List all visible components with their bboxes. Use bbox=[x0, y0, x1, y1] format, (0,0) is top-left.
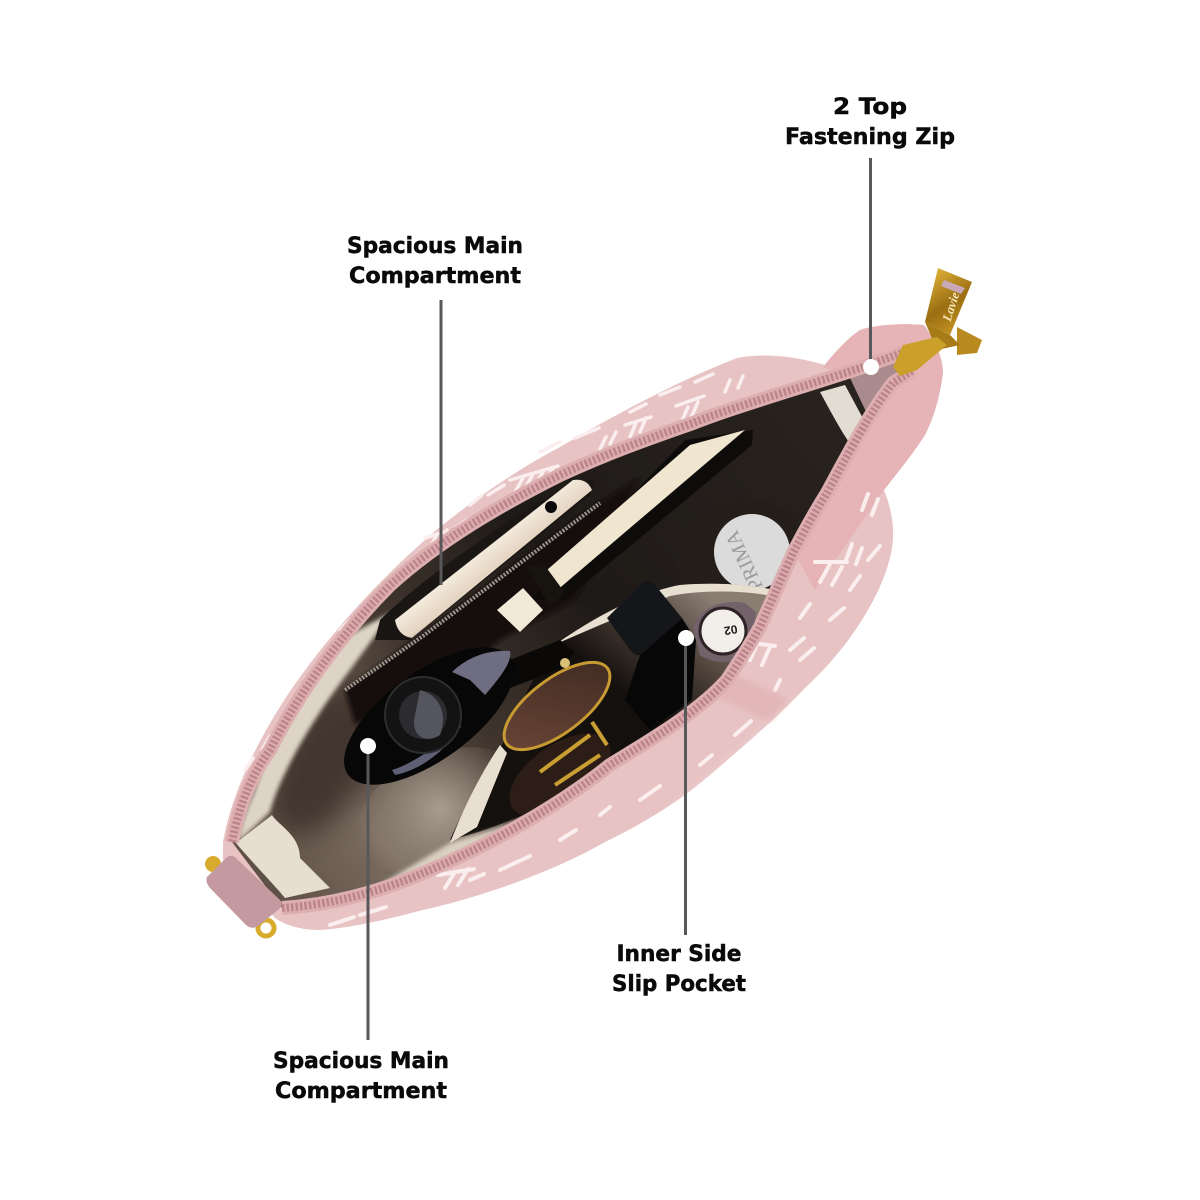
callout: spacious main compartment upper bbox=[347, 234, 523, 585]
callout heading: Spacious Main bbox=[273, 1049, 449, 1074]
callout: inner side slip pocket bbox=[612, 630, 746, 997]
marker dot bbox=[360, 738, 376, 754]
book cover bbox=[567, 430, 753, 598]
polish bottle bbox=[693, 602, 756, 662]
callout heading: Inner Side bbox=[616, 942, 742, 967]
cream lining lower edge bbox=[380, 819, 516, 882]
pull logo: Lavie bbox=[939, 290, 962, 324]
logo print on lower panel bbox=[330, 494, 880, 925]
lower zip teeth bbox=[282, 370, 913, 908]
book pages bbox=[547, 430, 745, 592]
brush star highlight bbox=[399, 691, 447, 739]
brush strap bbox=[510, 640, 574, 688]
dark shadow left side bbox=[264, 679, 376, 846]
nail polish bbox=[693, 602, 756, 662]
callout: 2 top fastening zip bbox=[785, 95, 955, 375]
leather strap tab bbox=[206, 856, 282, 928]
seam patch on lower panel bbox=[700, 670, 790, 722]
callout heading bbox=[347, 234, 523, 289]
mid bag floor bbox=[370, 747, 514, 868]
tab fabric near zip bbox=[790, 324, 943, 590]
upper lens bbox=[502, 660, 612, 752]
zip pull bbox=[925, 268, 972, 335]
hair brush bbox=[344, 640, 574, 785]
callout: spacious main compartment lower bbox=[273, 738, 449, 1104]
callout heading: Spacious Main bbox=[347, 234, 523, 259]
phone back shadow bbox=[375, 525, 520, 640]
organiser zipper bbox=[345, 503, 600, 690]
jar label: PRIMA bbox=[721, 527, 768, 594]
callout heading bbox=[612, 942, 746, 997]
lower zip tape bbox=[282, 370, 913, 908]
pull window bbox=[941, 280, 965, 294]
phone camera hole bbox=[545, 501, 557, 513]
polish shade number: 02 bbox=[723, 622, 738, 638]
cream lining bottom corner bbox=[236, 815, 330, 898]
lipstick cap bbox=[607, 581, 682, 655]
sunglasses bbox=[502, 658, 612, 815]
gold ring upper bbox=[205, 856, 221, 872]
lipstick body bbox=[625, 618, 696, 730]
phone body bbox=[395, 480, 592, 638]
lipstick black case bbox=[607, 581, 696, 730]
callout heading: 2 Top bbox=[833, 95, 907, 120]
leader line bbox=[869, 158, 872, 367]
gold arms bbox=[540, 722, 607, 785]
callout heading: Fastening Zip bbox=[785, 125, 955, 150]
bag illustration bbox=[205, 268, 982, 936]
sunglass hinge bbox=[560, 658, 570, 668]
gold ring lower bbox=[258, 920, 274, 936]
rear tab bbox=[957, 327, 982, 355]
brush highlight lower bbox=[392, 725, 462, 775]
marker dot bbox=[678, 630, 694, 646]
callout heading bbox=[785, 95, 955, 150]
logo print on upper panel bbox=[240, 374, 743, 800]
jar lid bbox=[714, 514, 790, 590]
cream strip by pocket bbox=[755, 590, 782, 630]
callout heading bbox=[273, 1049, 449, 1104]
link ring bbox=[925, 322, 960, 350]
callout heading: Compartment bbox=[349, 264, 521, 289]
jar dark glass bbox=[677, 498, 813, 622]
dark organiser panel bbox=[345, 478, 640, 725]
strap end bbox=[205, 856, 282, 936]
callout heading: Compartment bbox=[275, 1079, 447, 1104]
inner tab bbox=[850, 363, 897, 410]
leader line bbox=[366, 746, 370, 1040]
bag outer body bbox=[223, 324, 943, 930]
book bbox=[497, 430, 753, 632]
leader line bbox=[684, 638, 687, 935]
brush oval body bbox=[344, 648, 512, 785]
leader line bbox=[440, 300, 442, 585]
brush highlight upper bbox=[452, 651, 510, 695]
zip slider and pull bbox=[893, 268, 982, 376]
marker dot bbox=[863, 359, 879, 375]
slider bbox=[893, 337, 947, 376]
cream page square bbox=[497, 588, 543, 632]
white fade on lower edge bbox=[500, 700, 830, 920]
brush star boss bbox=[385, 677, 461, 753]
elastic band bbox=[540, 569, 564, 600]
phone bbox=[375, 478, 595, 640]
lower lens bbox=[510, 734, 610, 815]
callout heading: Slip Pocket bbox=[612, 972, 746, 997]
opening lining bbox=[232, 372, 897, 908]
upper zip teeth bbox=[232, 352, 905, 842]
jar bbox=[714, 514, 790, 588]
pocket cream rim bbox=[450, 584, 775, 843]
upper zip tape bbox=[232, 352, 905, 842]
slip pocket bbox=[450, 584, 775, 840]
polish cap label bbox=[700, 608, 746, 654]
cream corner lining bbox=[820, 385, 862, 440]
bag interior bbox=[232, 363, 897, 908]
cream lining top-left bbox=[238, 612, 392, 842]
